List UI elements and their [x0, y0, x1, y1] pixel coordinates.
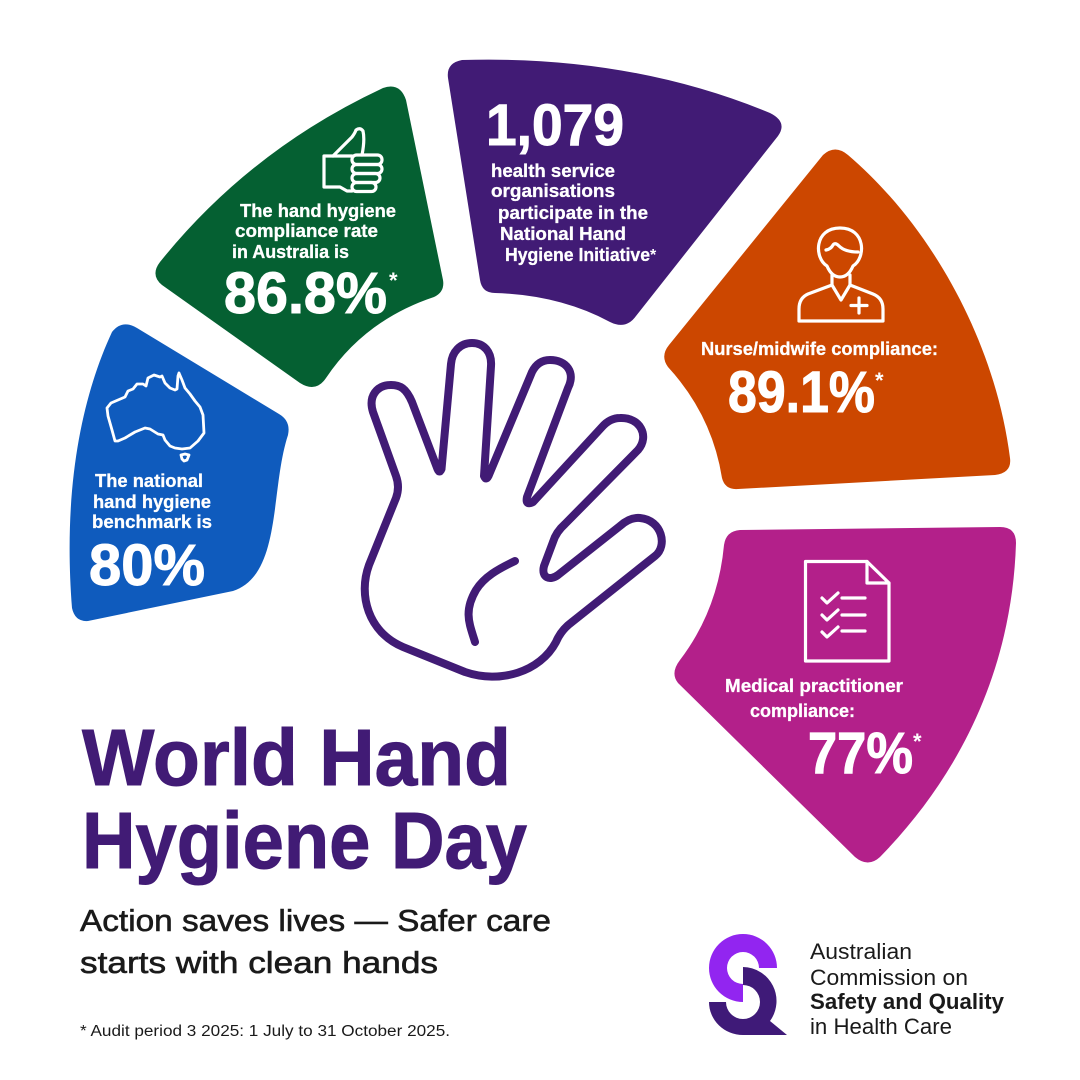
text: medical label: [725, 675, 903, 721]
logo: Australian Commission on Safety and Quality in Health Care: [709, 934, 1005, 1039]
text: participation label: National Hand: [500, 223, 626, 244]
text: organisation name: [810, 939, 1005, 1039]
text: medical label: Medical practitioner: [725, 675, 903, 696]
footnote: * Audit period 3 2025: 1 July to 31 October 2025.: [80, 1023, 450, 1040]
title: World Hand: [82, 713, 511, 802]
text: compliance label: in Australia is: [232, 241, 349, 262]
text: benchmark label: [92, 470, 212, 532]
title: [82, 713, 527, 885]
text: organisation name: Commission on: [810, 965, 968, 990]
panel: nurse/midwife compliance: [664, 150, 1010, 489]
text: compliance label: compliance rate: [235, 220, 378, 241]
icon: checklist document: [806, 562, 889, 661]
text: organisation name: Safety and Quality: [810, 989, 1005, 1014]
stat: 89.1%: *: [875, 368, 884, 393]
panel: 1,079 organisations: [448, 60, 782, 325]
icon: SQ logo mark: [709, 934, 787, 1035]
text: participation label: health service: [491, 160, 615, 181]
text: benchmark label: benchmark is: [92, 511, 212, 532]
text: medical label: compliance:: [750, 700, 855, 721]
text: compliance label: [232, 200, 396, 262]
text: organisation name: Australian: [810, 939, 912, 964]
text: organisation name: in Health Care: [810, 1014, 952, 1039]
icon: thumbs up: [324, 129, 382, 192]
stat: 86.8%: *: [389, 268, 398, 293]
stat: 77%: 77%: [808, 721, 913, 786]
panel: medical practitioner compliance: [674, 527, 1016, 862]
stat: 1,079: 1,079: [486, 93, 624, 158]
icon: map of Australia: [107, 373, 204, 461]
icon: hand outline: [365, 343, 662, 677]
text: participation label: *: [650, 247, 657, 264]
text: compliance label: The hand hygiene: [240, 200, 396, 221]
icon: nurse: [799, 228, 883, 321]
stat: 89.1%: 89.1%: [728, 360, 875, 425]
text: benchmark label: hand hygiene: [93, 491, 211, 512]
title: Hygiene Day: [82, 796, 527, 885]
text: benchmark label: The national: [95, 470, 203, 491]
text: participation label: participate in the: [498, 202, 648, 223]
panel: compliance rate 86.8%: [155, 86, 443, 387]
panel: national benchmark 80%: [70, 324, 289, 621]
text: participation label: [491, 160, 657, 265]
subtitle: starts with clean hands: [80, 945, 438, 980]
subtitle: Action saves lives — Safer care: [80, 903, 551, 938]
stat: 77%: *: [913, 729, 922, 754]
text: participation label: organisations: [491, 180, 615, 201]
text: nurse label: Nurse/midwife compliance:: [701, 338, 938, 359]
subtitle: [80, 903, 551, 980]
stat: 86.8%: 86.8%: [224, 261, 387, 326]
stat: 80%: 80%: [89, 533, 205, 598]
text: participation label: Hygiene Initiative: [505, 244, 650, 265]
